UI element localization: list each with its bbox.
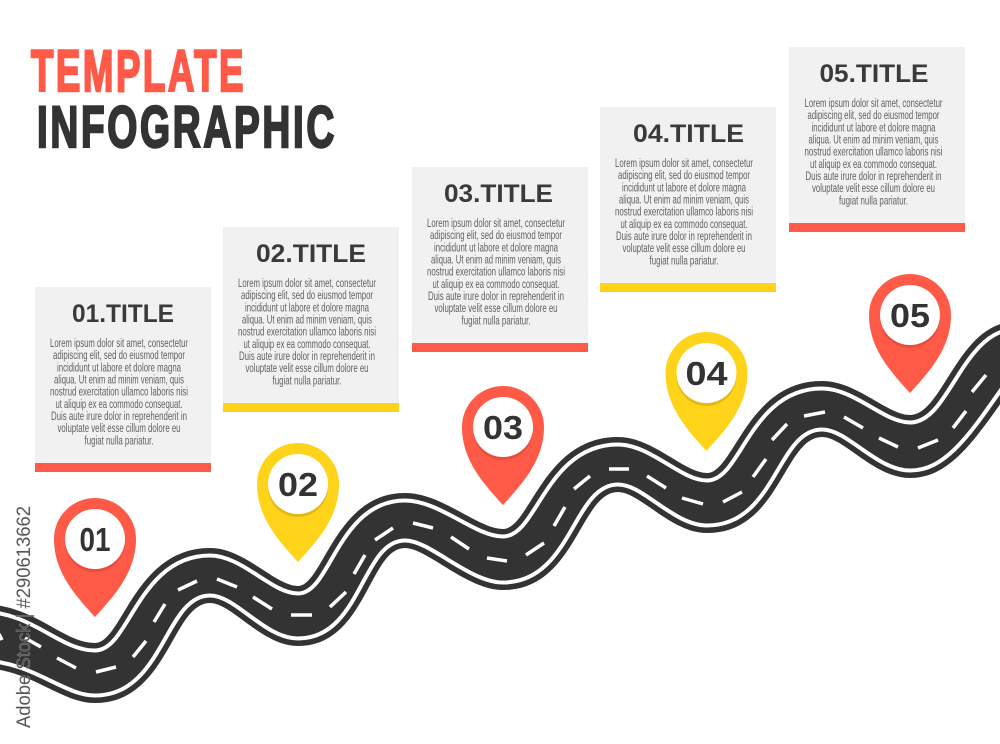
- panel: step 04: fugiat nulla pariatur.: [650, 253, 718, 267]
- panel: step 02: ut aliquip ex ea commodo consequat.: [244, 337, 370, 351]
- pin 05: 05: [890, 297, 930, 334]
- panel: step 04: nostrud exercitation ullamco laboris nisi: [615, 205, 753, 219]
- winding road: [0, 322, 1000, 703]
- panel: step 03: [412, 167, 588, 352]
- panel: step 04: [600, 107, 776, 292]
- panel: step 01: nostrud exercitation ullamco laboris nisi: [50, 385, 188, 399]
- panel: step 01: aliqua. Ut enim ad minim veniam, quis: [54, 372, 184, 386]
- panel: step 02: fugiat nulla pariatur.: [272, 373, 342, 387]
- panel: step 02: 02.TITLE: [256, 240, 366, 268]
- panel: step 03: Lorem ipsum dolor sit amet, consectetur: [427, 216, 565, 230]
- panel: step 03: adipiscing elit, sed do eiusmod tempor: [430, 228, 562, 242]
- panel: step 02: [223, 227, 399, 412]
- panel: step 05: 05.TITLE: [820, 60, 928, 88]
- pin 03: 03: [483, 409, 523, 446]
- pin 01: [54, 498, 136, 617]
- panel: step 01: fugiat nulla pariatur.: [84, 433, 154, 447]
- panel: step 02: Duis aute irure dolor in reprehenderit in: [239, 349, 375, 363]
- panel: step 01: [35, 287, 211, 472]
- pin 03: [462, 386, 544, 505]
- panel: step 04: Duis aute irure dolor in reprehenderit in: [616, 229, 752, 243]
- title: template infographic: TEMPLATE: [31, 39, 246, 104]
- panel: step 03: incididunt ut labore et dolore magna: [434, 240, 558, 254]
- panel: step 03: 03.TITLE: [444, 180, 553, 208]
- panel: step 05: fugiat nulla pariatur.: [839, 193, 908, 207]
- panel: step 03: fugiat nulla pariatur.: [462, 313, 530, 327]
- panel: step 02: incididunt ut labore et dolore magna: [245, 300, 369, 314]
- panel: step 03: ut aliquip ex ea commodo consequat.: [432, 277, 560, 291]
- panel: step 02: Lorem ipsum dolor sit amet, consectetur: [238, 276, 376, 290]
- panel: step 01: voluptate velit esse cillum dolore eu: [58, 421, 181, 435]
- panel: step 04: 04.TITLE: [633, 120, 744, 148]
- panel: step 04: voluptate velit esse cillum dolore eu: [622, 241, 746, 255]
- panel: step 04: Lorem ipsum dolor sit amet, consectetur: [615, 156, 753, 170]
- panel: step 01: incididunt ut labore et dolore magna: [57, 360, 181, 374]
- panel: step 03: voluptate velit esse cillum dolore eu: [434, 301, 558, 315]
- panel: step 01: adipiscing elit, sed do eiusmod tempor: [53, 348, 185, 362]
- pin 04: 04: [686, 355, 728, 392]
- panel: step 04: aliqua. Ut enim ad minim veniam, quis: [619, 192, 749, 206]
- panel: step 02: adipiscing elit, sed do eiusmod tempor: [241, 288, 373, 302]
- panel: step 03: nostrud exercitation ullamco laboris nisi: [427, 265, 565, 279]
- panel: step 03: Duis aute irure dolor in reprehenderit in: [428, 289, 564, 303]
- panel: step 01: Duis aute irure dolor in reprehenderit in: [51, 409, 187, 423]
- pin 04: [666, 332, 748, 451]
- panel: step 01: Lorem ipsum dolor sit amet, consectetur: [50, 336, 188, 350]
- panel: step 05: [789, 47, 965, 232]
- panel: step 02: aliqua. Ut enim ad minim veniam, quis: [242, 312, 372, 326]
- panel: step 02: voluptate velit esse cillum dolore eu: [246, 361, 369, 375]
- pin 05: [869, 274, 951, 393]
- panel: step 01: ut aliquip ex ea commodo consequat.: [56, 397, 182, 411]
- panel: step 04: adipiscing elit, sed do eiusmod tempor: [618, 168, 750, 182]
- pin 02: 02: [278, 466, 318, 503]
- title: template infographic: INFOGRAPHIC: [37, 95, 337, 160]
- title: template infographic: [31, 39, 337, 160]
- panel: step 01: 01.TITLE: [72, 300, 174, 328]
- panel: step 04: incididunt ut labore et dolore magna: [622, 180, 746, 194]
- pin 02: [257, 443, 339, 562]
- pin 01: 01: [80, 521, 110, 558]
- panel: step 02: nostrud exercitation ullamco laboris nisi: [238, 325, 376, 339]
- panel: step 04: ut aliquip ex ea commodo consequat.: [620, 217, 748, 231]
- stock id caption: Adobe Stock | #290613662: [14, 506, 35, 728]
- panel: step 03: aliqua. Ut enim ad minim veniam, quis: [431, 252, 561, 266]
